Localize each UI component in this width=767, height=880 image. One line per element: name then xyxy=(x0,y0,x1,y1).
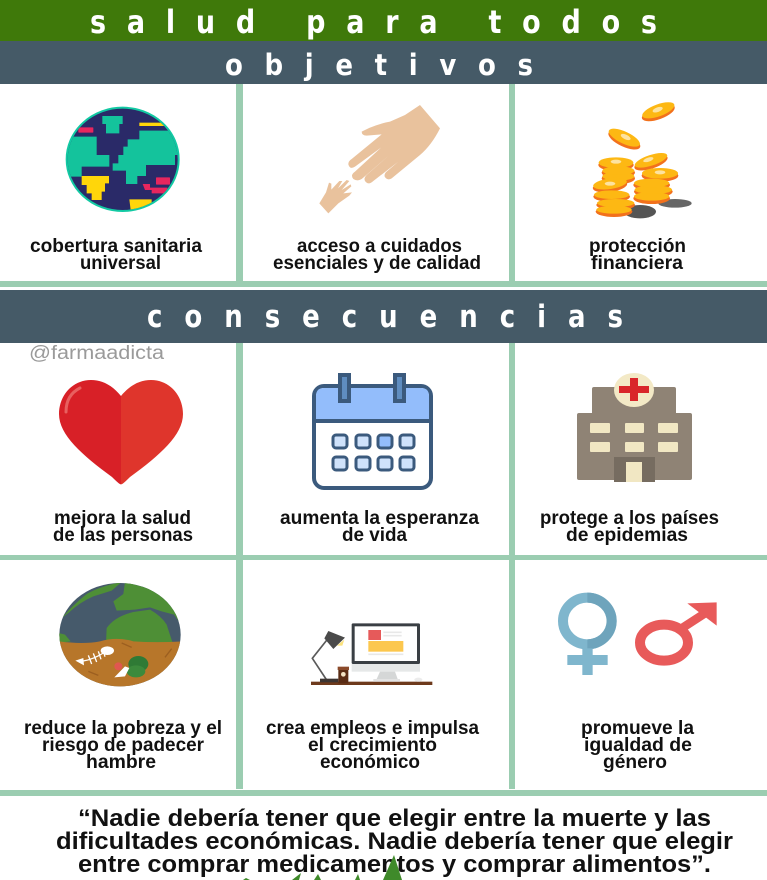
label: aumenta la esperanza: de vida xyxy=(342,525,407,546)
label: reduce la pobreza: riesgo de padecer xyxy=(42,735,205,756)
label: crea empleos xyxy=(266,718,479,773)
watermark: @farmaadicta xyxy=(29,343,164,364)
icon: earth with barren ground xyxy=(57,581,183,691)
label: protección financiera: protección xyxy=(589,236,686,257)
label: protege a los países: de epidemias xyxy=(566,525,688,546)
label: promueve la igualdad xyxy=(581,718,694,773)
label: aumenta la esperanza: aumenta la esperanza xyxy=(280,508,479,529)
quote: entre comprar medicamentos y comprar alimentos”. xyxy=(78,851,711,878)
heading: consecuencias: consecuencias xyxy=(147,298,623,335)
label: reduce la pobreza: hambre xyxy=(86,752,156,773)
icon: stacks of coins xyxy=(592,99,692,218)
label: mejora la salud: mejora la salud xyxy=(54,508,191,529)
label: cobertura sanitaria universal: cobertura sanitaria xyxy=(30,236,202,257)
label: crea empleos: el crecimiento xyxy=(308,735,437,756)
label: protege a los países: protege a los países xyxy=(540,508,719,529)
label: protege a los países xyxy=(540,508,719,546)
label: protección financiera xyxy=(589,236,686,274)
icon: gender symbols xyxy=(563,593,717,675)
icon: heart xyxy=(59,380,183,484)
label: promueve la igualdad: igualdad de xyxy=(584,735,692,756)
icon: grass tips xyxy=(243,855,402,880)
quote xyxy=(56,805,733,878)
icon: desk with computer xyxy=(311,623,432,685)
label: reduce la pobreza xyxy=(24,718,222,773)
label: aumenta la esperanza xyxy=(280,508,479,546)
label: promueve la igualdad: promueve la xyxy=(581,718,694,739)
label: cobertura sanitaria universal xyxy=(30,236,202,274)
quote: dificultades económicas. Nadie debería tener que elegir xyxy=(56,828,733,855)
label: acceso a cuidados xyxy=(273,236,481,274)
label: cobertura sanitaria universal: universal xyxy=(80,253,161,274)
heading: objetivos: objetivos xyxy=(225,48,533,82)
label: reduce la pobreza: reduce la pobreza y el xyxy=(24,718,222,739)
icon: calendar xyxy=(314,373,431,488)
title banner xyxy=(0,0,767,42)
label: acceso a cuidados: acceso a cuidados xyxy=(297,236,462,257)
label: protección financiera: financiera xyxy=(591,253,683,274)
heading: consecuencias xyxy=(0,290,767,343)
label: mejora la salud: de las personas xyxy=(53,525,193,546)
icon: hospital xyxy=(577,373,692,482)
label: mejora la salud xyxy=(53,508,193,546)
label: crea empleos: crea empleos e impulsa xyxy=(266,718,479,739)
icon: reaching hands xyxy=(319,105,440,213)
icon: pixel globe xyxy=(60,108,180,211)
label: acceso a cuidados: esenciales y de calidad xyxy=(273,253,481,274)
heading: objetivos xyxy=(0,41,767,84)
label: crea empleos: económico xyxy=(320,752,420,773)
title banner: salud para todos xyxy=(90,4,657,42)
quote: “Nadie debería tener que elegir entre la muerte y las xyxy=(78,805,711,832)
label: promueve la igualdad: género xyxy=(603,752,667,773)
